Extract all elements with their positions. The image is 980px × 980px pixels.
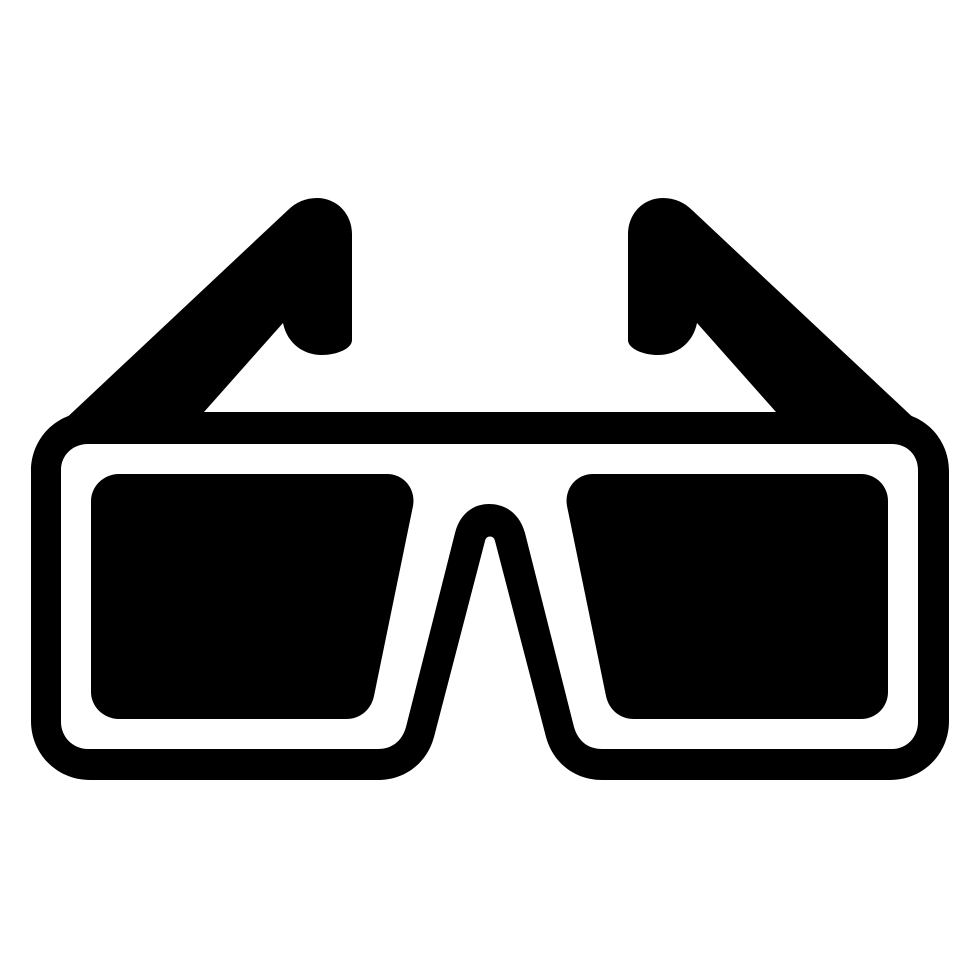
right temple arm [628, 198, 920, 440]
frame outline [31, 412, 949, 780]
left temple arm [60, 198, 352, 440]
left lens [91, 474, 413, 719]
frame white inner [61, 444, 918, 749]
right lens [567, 474, 888, 719]
